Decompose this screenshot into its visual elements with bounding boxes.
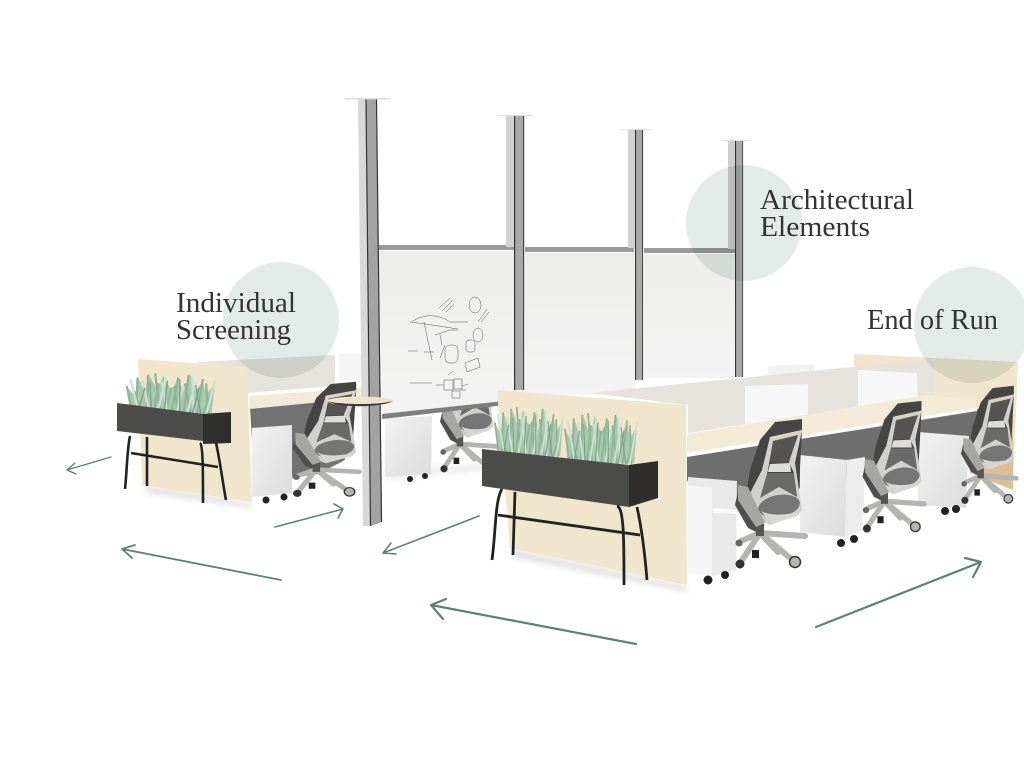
highlight circle: architectural elements: [686, 165, 802, 281]
planter box: [117, 403, 203, 441]
label: individual screening: Screening: [176, 315, 291, 346]
whiteboard panel 3: [644, 254, 735, 378]
planter box: [482, 449, 629, 507]
horizontal transoms: [379, 245, 735, 253]
pedestal: [252, 425, 292, 504]
highlight circle: end of run: [914, 267, 1024, 383]
middle chair: [862, 401, 924, 532]
column 2: [497, 115, 533, 390]
under-desk modesty panel: [250, 398, 345, 478]
planter legs: [125, 436, 226, 503]
screen: [197, 355, 335, 393]
label: end of run: End of Run: [867, 305, 998, 336]
whiteboard sketch: [408, 297, 489, 398]
front pedestal: [688, 477, 737, 584]
far chair: [961, 386, 1016, 504]
partition rear chair: [440, 353, 496, 472]
left grass: [127, 374, 215, 414]
fabric screens: [590, 360, 935, 433]
panel: whiteboard partition: [379, 245, 735, 419]
wood end panel: [138, 359, 252, 502]
middle pedestal: [800, 455, 865, 547]
arrow: right: [816, 558, 981, 627]
left planter: [117, 374, 231, 503]
column 3: [620, 129, 652, 380]
arrow: aisle right: [275, 504, 343, 527]
column 4: [722, 140, 750, 377]
panel: left workstation: [117, 354, 362, 504]
whiteboard panel 2: [525, 253, 635, 395]
far white screen: [768, 364, 815, 384]
right planter: [482, 408, 658, 585]
desktop: [687, 395, 990, 453]
label: architectural elements: Architectural: [760, 185, 914, 216]
whiteboard panel 1: [379, 251, 514, 416]
arrow: far left: [67, 457, 111, 474]
desktop: [250, 388, 362, 409]
panel: right workstation: [482, 354, 1018, 585]
left chair: [293, 382, 359, 497]
wood end panel: [497, 390, 687, 585]
arrow: center: [383, 516, 479, 554]
arrow: center lower: [431, 599, 636, 644]
round table top: [327, 396, 393, 406]
white divider screens: [745, 370, 918, 431]
floor shadows: [142, 462, 687, 592]
under-desk modesty panel: [687, 408, 985, 510]
right grass clump two: [565, 414, 637, 463]
arrow: left lower: [122, 545, 281, 580]
rear pedestal: [385, 416, 432, 482]
highlight circle: individual screening: [223, 262, 339, 378]
front chair: [735, 419, 805, 568]
label: individual screening: Individual: [176, 288, 296, 319]
column 1: [345, 98, 390, 526]
label: architectural elements: Elements: [760, 212, 870, 243]
whiteboard base rail: [382, 400, 514, 419]
planter legs: [492, 489, 647, 585]
white divider: [339, 354, 361, 380]
right grass clump one: [495, 408, 563, 456]
far inner wood: [962, 400, 1013, 490]
far pedestal: [918, 432, 969, 515]
far end panel: [854, 354, 1018, 490]
